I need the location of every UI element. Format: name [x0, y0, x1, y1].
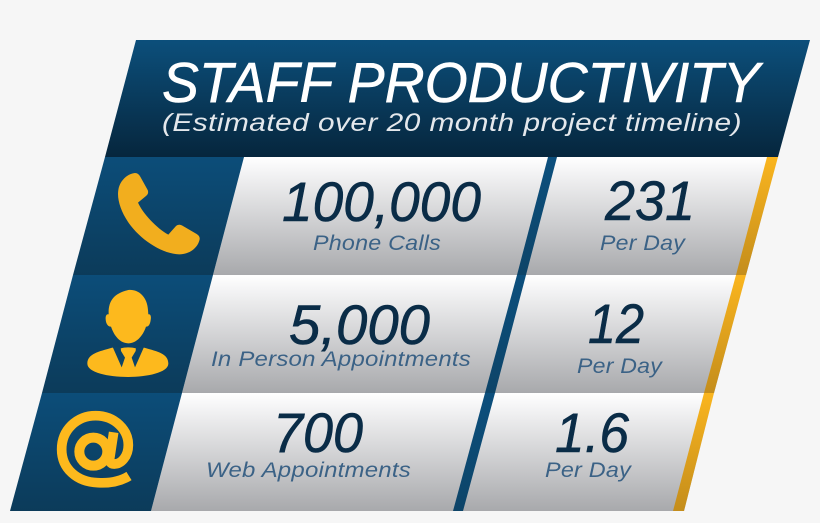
gold edge — [736, 157, 778, 275]
rate label: Per Day — [577, 354, 663, 378]
label: In Person Appointments — [211, 347, 471, 371]
icon: phone — [118, 173, 200, 254]
value: 700 — [273, 401, 363, 464]
rate value: 12 — [588, 292, 644, 355]
icon: person — [87, 290, 168, 377]
gold edge — [704, 275, 746, 393]
gold edge — [673, 393, 714, 511]
rate value: 1.6 — [555, 401, 630, 464]
rate label: Per Day — [545, 458, 632, 482]
rate value: 231 — [604, 169, 695, 232]
label: Phone Calls — [313, 231, 441, 255]
divider — [517, 157, 557, 275]
panel: row phone calls — [73, 157, 778, 275]
panel: header — [105, 40, 810, 157]
divider — [485, 275, 526, 393]
value: 100,000 — [282, 170, 481, 233]
value: 5,000 — [289, 293, 430, 356]
divider — [453, 393, 495, 511]
subtitle: (Estimated over 20 month project timeline) — [162, 109, 742, 137]
icon: at sign — [62, 416, 129, 483]
panel: row web appointments — [10, 393, 714, 511]
panel: row in person appointments — [42, 275, 746, 393]
title: STAFF PRODUCTIVITY — [162, 51, 764, 115]
rate label: Per Day — [600, 231, 686, 255]
label: Web Appointments — [206, 458, 411, 482]
